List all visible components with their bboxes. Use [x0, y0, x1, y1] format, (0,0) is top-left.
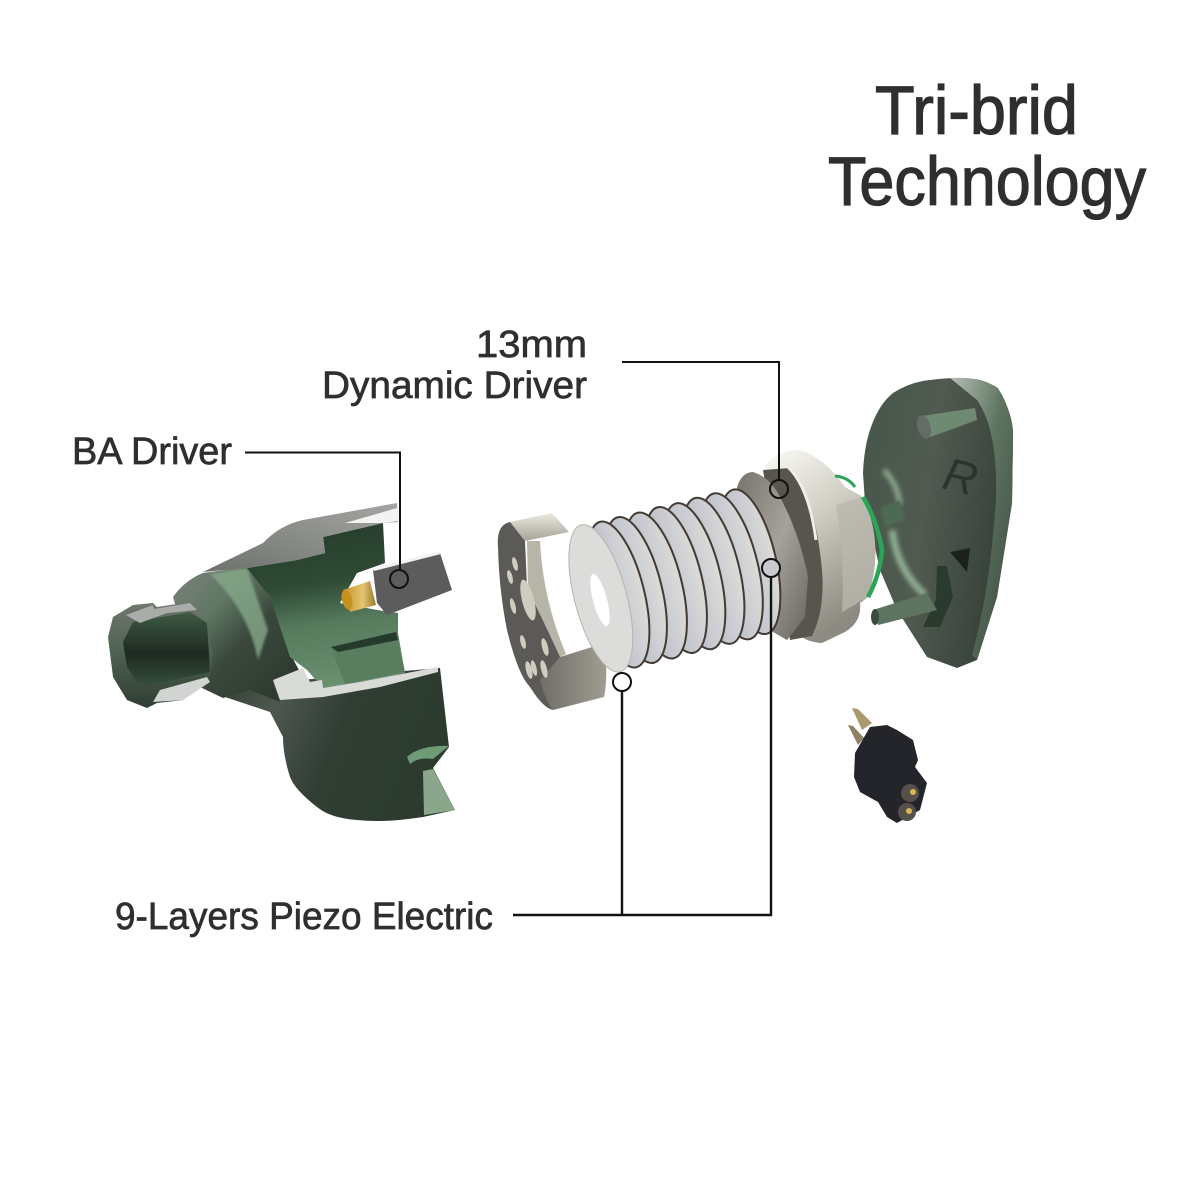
back cover outline	[863, 378, 1013, 668]
speckled cylinder shade	[836, 497, 875, 612]
connector sockets	[901, 784, 919, 802]
label: BA Driver	[72, 431, 408, 588]
lower peg	[873, 593, 937, 625]
nozzle barrel	[108, 602, 213, 708]
connector body	[854, 725, 927, 823]
piezo back plate	[498, 513, 606, 710]
connector pins	[852, 708, 872, 730]
9-layer piezo discs	[556, 484, 792, 678]
top silver cover	[203, 503, 398, 572]
bottom shell notch	[407, 746, 449, 764]
plate face	[498, 522, 562, 710]
top peg	[922, 408, 977, 439]
plate top band	[510, 513, 569, 541]
letter R: R	[938, 447, 983, 506]
plate lower side	[540, 643, 606, 710]
interior recess	[331, 632, 405, 684]
inner face highlights	[884, 470, 925, 595]
BA driver block	[373, 553, 452, 615]
label: 9-Layers Piezo Electric: 9-Layers Piezo Electric	[115, 896, 493, 938]
label: 13mm Dynamic Driver: 13mm	[476, 324, 587, 366]
nozzle opening	[123, 612, 210, 687]
plate holes	[506, 557, 550, 679]
label: 13mm Dynamic Driver: Dynamic Driver	[322, 365, 587, 407]
title: Tri-brid	[875, 72, 1078, 149]
13mm dynamic driver unit	[737, 450, 882, 643]
bottom tab	[423, 769, 455, 815]
flange bright band	[782, 462, 816, 540]
flange inner ring	[763, 468, 823, 640]
plate inner arc	[527, 541, 566, 657]
neck	[173, 567, 300, 702]
title	[828, 72, 1146, 220]
central hub	[880, 500, 905, 527]
interior of shell	[247, 523, 405, 688]
label: 9-Layers Piezo Electric	[115, 559, 780, 938]
shell back cover	[863, 378, 1013, 668]
lower silver rim	[273, 667, 438, 700]
label: BA Driver: BA Driver	[72, 431, 232, 473]
back cover rim	[950, 378, 1013, 660]
lower shell body	[225, 640, 455, 821]
disc centre hole	[586, 572, 614, 628]
green seal	[863, 497, 882, 597]
triangular slot	[950, 548, 970, 572]
driver cup	[737, 472, 808, 640]
leader lines	[513, 578, 771, 915]
nozzle lip highlights	[126, 603, 197, 623]
label: 13mm Dynamic Driver	[322, 324, 788, 498]
earphone front shell with BA driver	[108, 503, 455, 821]
gold connector	[343, 581, 376, 612]
title: Technology	[828, 143, 1146, 220]
leader line	[622, 362, 779, 480]
2-pin connector	[848, 708, 927, 823]
neck green highlight band	[210, 568, 268, 660]
leader line	[245, 452, 400, 570]
driver housing silhouette	[765, 450, 875, 643]
lower slot	[923, 566, 953, 627]
